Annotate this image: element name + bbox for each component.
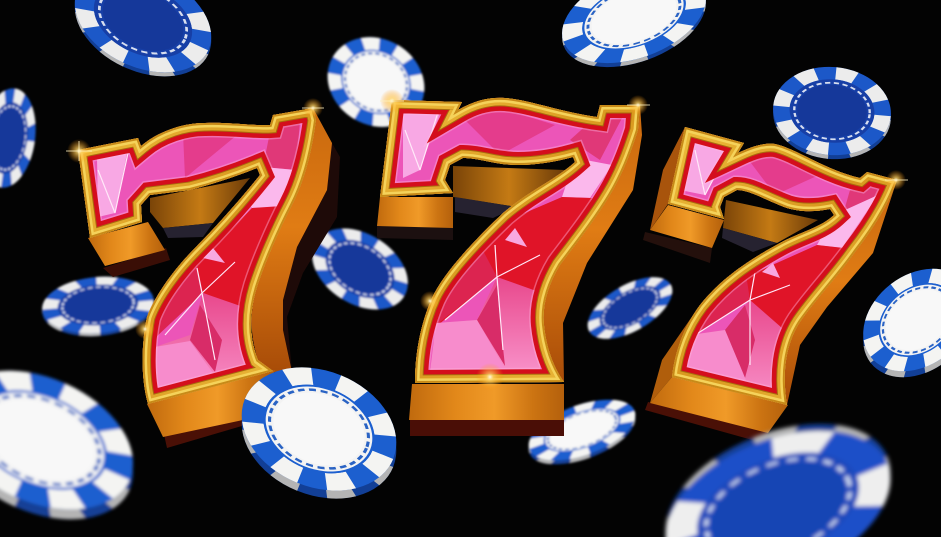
seven centre: inner extrusion: [453, 166, 565, 207]
chip: left edge: [0, 85, 42, 191]
chip: top centre blurred: [311, 20, 441, 144]
seven left: inner shadow: [163, 223, 213, 238]
seven centre: base extrusion: [409, 384, 564, 420]
chip: top left: [58, 0, 228, 97]
seven: centre: [370, 90, 650, 436]
glints on seven corners: [66, 89, 908, 391]
seven left: gem face and gold frame: [78, 108, 316, 404]
seven left: arm shadow: [103, 248, 170, 277]
seven left: inner extrusion: [150, 178, 250, 228]
seven centre: arm shadow: [377, 224, 453, 240]
chip: centre right small: [578, 265, 682, 351]
chip: left middle: [40, 272, 156, 341]
seven centre: orange side extrusion: [544, 105, 642, 382]
chip: top right partially cropped: [549, 0, 719, 85]
seven right: orange side extrusion: [785, 180, 897, 405]
seven: left: [70, 100, 340, 448]
seven right: base extrusion: [650, 377, 788, 433]
chip: lower centre white: [223, 345, 415, 521]
chip: bottom right large: [662, 420, 894, 537]
seven left: orange side extrusion: [252, 108, 332, 372]
seven centre: gem face and gold frame: [380, 98, 640, 383]
chip: behind first and second seven: [297, 212, 423, 326]
seven right: inner extrusion: [723, 200, 818, 243]
seven right: arm shadow: [643, 232, 712, 263]
chip: right edge: [843, 248, 941, 398]
seven left: arm extrusion: [88, 222, 165, 266]
seven: right: [640, 120, 910, 443]
seven centre: arm extrusion: [377, 197, 453, 228]
chip: bottom left large: [0, 368, 136, 522]
seven right: gem face and gold frame: [668, 127, 897, 405]
seven right: base shadow: [645, 402, 770, 443]
seven left: base extrusion: [147, 370, 275, 437]
seven centre: inner shadow: [455, 197, 517, 218]
seven right: inner shadow: [722, 228, 777, 252]
chip: upper right blue: [769, 62, 895, 164]
seven right: left arm side: [650, 127, 685, 230]
seven right: lower left side: [650, 305, 700, 403]
seven centre: base shadow: [410, 418, 564, 436]
seven left: dark rear edge: [250, 115, 340, 372]
chip: lower centre right: [521, 387, 643, 477]
seven left: base shadow: [163, 396, 262, 448]
seven right: arm extrusion: [650, 205, 724, 248]
